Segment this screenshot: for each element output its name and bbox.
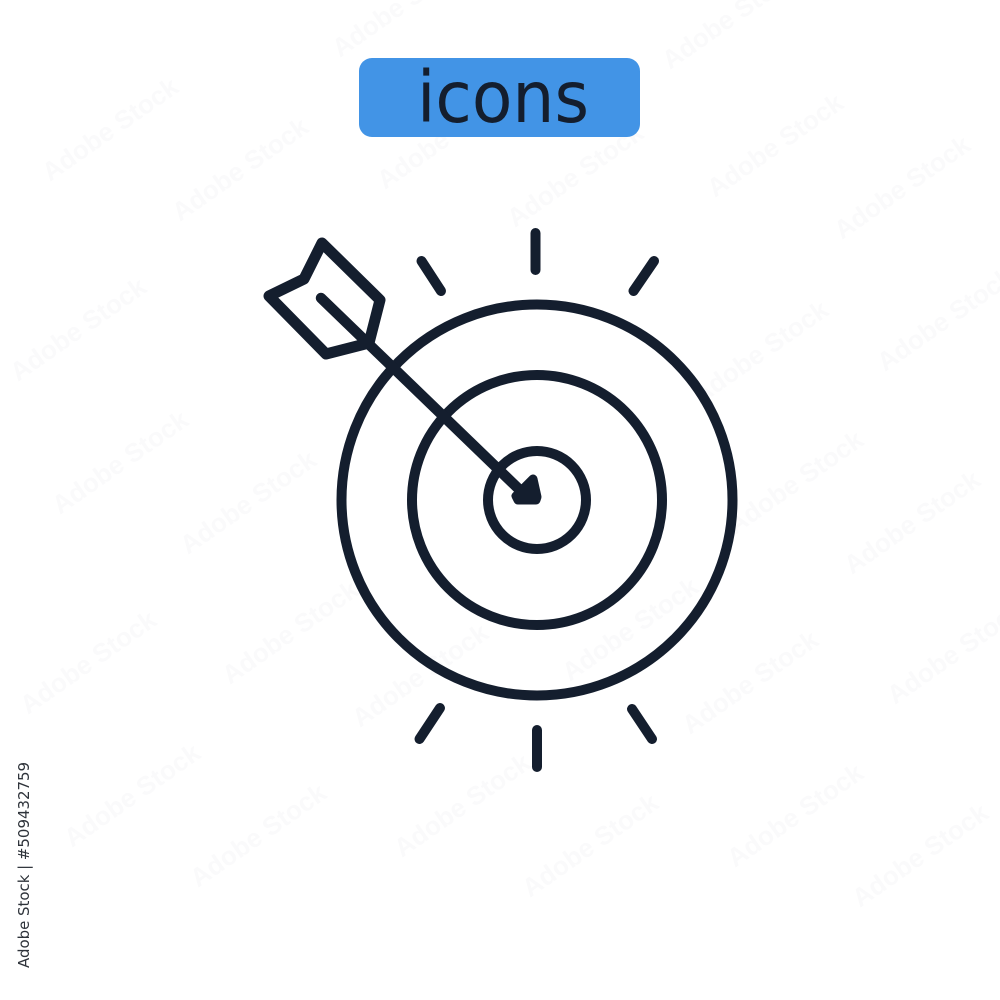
target: outer ring xyxy=(342,304,732,696)
text: Adobe Stock xyxy=(184,777,332,893)
text: Adobe Stock xyxy=(216,574,364,690)
text: Adobe Stock xyxy=(556,571,704,687)
text: Adobe Stock xyxy=(371,79,519,195)
text: Adobe Stock xyxy=(721,424,869,540)
text: Adobe Stock xyxy=(846,797,994,913)
text: Adobe Stock xyxy=(346,617,494,733)
text: Adobe Stock xyxy=(4,271,152,387)
side credit text: Adobe Stock | #509432759 xyxy=(15,762,33,968)
text: Adobe Stock xyxy=(516,787,664,903)
target: bullseye ring xyxy=(488,451,586,549)
arrow: head xyxy=(516,479,537,500)
text: Adobe Stock xyxy=(686,294,834,410)
text: Adobe Stock xyxy=(721,757,869,873)
badge: icons title: icons xyxy=(417,56,589,139)
text: Adobe Stock xyxy=(828,129,976,245)
text: Adobe Stock xyxy=(676,624,824,740)
text: Adobe Stock xyxy=(701,87,849,203)
text: Adobe Stock xyxy=(14,604,162,720)
text: Adobe Stock xyxy=(166,111,314,227)
arrow: shaft xyxy=(321,298,525,495)
badge: icons title xyxy=(359,56,640,139)
text: Adobe Stock xyxy=(388,747,536,863)
icon: target with arrow xyxy=(269,233,732,767)
arrow: fletching xyxy=(269,243,380,354)
rays: top burst xyxy=(422,233,654,291)
text: Adobe Stock xyxy=(174,444,322,560)
text: Adobe Stock xyxy=(36,71,184,187)
target: middle ring xyxy=(412,375,662,625)
text: Adobe Stock xyxy=(501,117,649,233)
text: Adobe Stock xyxy=(46,404,194,520)
text: Adobe Stock xyxy=(58,737,206,853)
rays: bottom burst xyxy=(420,708,652,767)
text: Adobe Stock xyxy=(838,464,986,580)
